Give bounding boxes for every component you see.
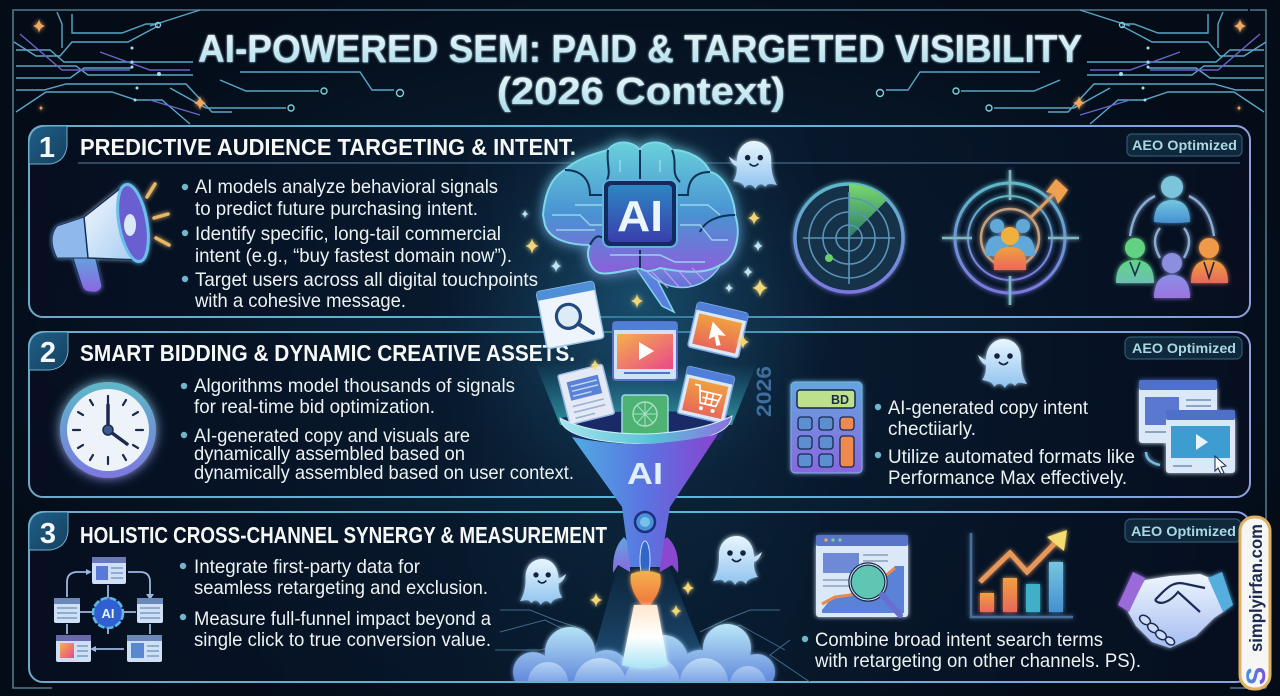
text block: panel 2 bullets: AI-generated copy and visuals are — [194, 425, 470, 447]
icon: ghost 1 — [729, 141, 777, 189]
sparkles near rocket — [590, 335, 749, 617]
text block: panel 2 right bullets — [875, 397, 1135, 489]
icon: ghost 4 — [713, 536, 762, 585]
text block: panel 3 bullets: seamless retargeting and exclusion. — [194, 577, 488, 599]
icon: calculator — [791, 382, 862, 473]
text block: panel 3 bullets: Measure full-funnel impact beyond a — [194, 608, 491, 630]
icon: clock — [60, 382, 156, 478]
heading 2: SMART BIDDING & DYNAMIC CREATIVE ASSETS. — [80, 340, 575, 366]
text block: panel 1 bullets: Identify specific, long-tail commercial — [195, 223, 501, 245]
central glow — [440, 90, 840, 510]
text block: panel 1 bullets: intent (e.g., “buy fastest domain now”). — [195, 245, 512, 267]
card: globe — [622, 395, 668, 435]
rocket exhaust — [622, 605, 668, 668]
title: AI-POWERED SEM: PAID & TARGETED VISIBILITY — [198, 28, 1082, 71]
icon: brain with AI chip — [543, 142, 738, 312]
text block: panel 2 right bullets: chectiiarly. — [888, 418, 976, 440]
icon: audience network — [1116, 176, 1228, 298]
icon: brain with AI chip: AI — [617, 192, 663, 241]
icon: growth bar chart — [971, 530, 1073, 617]
text block: panel 3 bullets: single click to true conversion value. — [194, 629, 491, 651]
badge 1: AEO Optimized — [1132, 138, 1237, 153]
icon: calculator: BD — [831, 393, 849, 407]
badge 3: AEO Optimized — [1131, 524, 1236, 539]
background circuit lines near clouds — [495, 610, 810, 682]
text block: panel 3 right bullets: with retargeting on other channels. PS). — [814, 650, 1141, 672]
text block: panel 3 bullets — [180, 556, 491, 651]
text block: panel 1 bullets: with a cohesive message. — [194, 290, 406, 312]
badge 3 — [1125, 519, 1241, 542]
panel: predictive audience targeting — [29, 126, 1250, 317]
panel: predictive audience targeting: 1 — [39, 132, 55, 164]
icon: ghost 2 — [978, 339, 1027, 388]
heading 1: PREDICTIVE AUDIENCE TARGETING & INTENT. — [80, 134, 576, 160]
text block: panel 3 right bullets — [802, 629, 1141, 672]
title — [198, 28, 1082, 113]
text block: panel 2 right bullets: Utilize automated formats like — [888, 446, 1135, 468]
sparkles top corners — [33, 19, 1246, 111]
text block: panel 2 right bullets: AI-generated copy intent — [888, 397, 1089, 419]
text block: panel 1 bullets: to predict future purchasing intent. — [195, 198, 478, 220]
text block: panel 2 bullets — [181, 375, 574, 484]
inner funnel mouth — [560, 411, 732, 440]
icon: radar — [795, 184, 903, 292]
text block: panel 3 right bullets: Combine broad intent search terms — [815, 629, 1103, 651]
badge 1 — [1127, 134, 1242, 156]
text block: panel 3 bullets: Integrate first-party data for — [194, 556, 420, 578]
icon: channel flow diagram — [54, 557, 163, 662]
icon: megaphone — [52, 182, 169, 292]
light beam — [535, 363, 757, 425]
card: search — [536, 281, 604, 349]
text block: panel 2 bullets: for real-time bid optimization. — [194, 396, 435, 418]
exhaust beam — [590, 565, 708, 665]
title: (2026 Context) — [497, 71, 785, 113]
rocket flame — [631, 571, 661, 610]
watermark: simplyirfan.com — [1246, 524, 1266, 652]
circuit decoration right — [876, 10, 1266, 124]
icon: analytics window with magnifier — [816, 535, 908, 617]
funnel and rocket: AI — [627, 456, 663, 491]
card: cart — [677, 366, 735, 424]
watermark: S — [1241, 667, 1271, 685]
panel: holistic cross-channel — [29, 512, 1250, 682]
text block: panel 2 right bullets: Performance Max effectively. — [888, 467, 1127, 489]
icon: target with audience — [942, 170, 1079, 305]
card: cursor — [687, 302, 749, 358]
funnel and rocket — [572, 434, 718, 579]
card: video — [613, 322, 677, 380]
icon: ghost 3 — [520, 559, 566, 605]
panel: smart bidding — [29, 332, 1250, 497]
badge 2: AEO Optimized — [1132, 341, 1236, 356]
icon: handshake — [1118, 572, 1233, 648]
text block: panel 2 bullets: dynamically assembled based on user context. — [194, 462, 574, 484]
text block: panel 2 bullets: dynamically assembled based on — [194, 443, 465, 465]
sparkles around brain — [521, 210, 768, 386]
icon: channel flow diagram: AI — [102, 606, 114, 621]
clouds — [510, 620, 778, 681]
panel: holistic cross-channel: 3 — [40, 518, 56, 550]
badge 2 — [1125, 337, 1242, 359]
text block: panel 2 bullets: Algorithms model thousands of signals — [194, 375, 515, 397]
heading 3: HOLISTIC CROSS-CHANNEL SYNERGY & MEASUREMENT — [80, 522, 607, 548]
funnel rim — [560, 416, 732, 444]
watermark — [1240, 517, 1271, 689]
text block: panel 1 bullets — [182, 176, 538, 312]
icon: ad windows — [1139, 380, 1235, 474]
circuit decoration left — [14, 10, 404, 124]
panel: smart bidding: 2 — [40, 337, 56, 369]
label: 2026: 2026 — [753, 366, 776, 417]
card: document — [558, 364, 615, 425]
text block: panel 1 bullets: Target users across all digital touchpoints — [195, 269, 538, 291]
text block: panel 1 bullets: AI models analyze behavioral signals — [195, 176, 498, 198]
